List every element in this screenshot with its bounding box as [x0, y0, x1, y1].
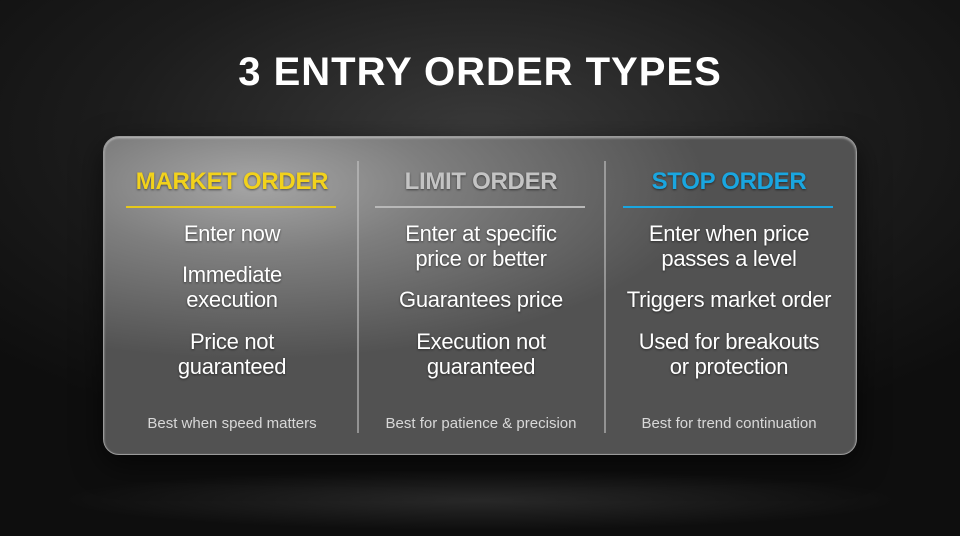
- column: limit order: Execution not: [416, 329, 546, 354]
- heading: market order: MARKET ORDER: [136, 168, 328, 195]
- column: limit order: guaranteed: [427, 354, 535, 379]
- panel: comparison card: [103, 136, 857, 455]
- column: stop order: [623, 168, 833, 432]
- footer: market: Best when speed matters: [147, 415, 317, 432]
- footer: limit: Best for patience & precision: [386, 415, 576, 432]
- text: stop points: passes a level: [661, 246, 797, 271]
- footer: stop: Best for trend continuation: [641, 415, 817, 432]
- text: stop points: Enter when price: [649, 221, 809, 246]
- column: limit order: Guarantees price: [399, 287, 563, 312]
- column: stop order: Used for breakouts: [639, 329, 819, 354]
- column: market order: Immediate: [182, 262, 282, 287]
- column: market order: [126, 168, 336, 432]
- text: limit points: Enter at specific: [405, 221, 557, 246]
- column: market order: Price not: [190, 329, 274, 354]
- column: market order: execution: [186, 287, 278, 312]
- column: market order: guaranteed: [178, 354, 286, 379]
- column: limit order: [375, 168, 585, 432]
- column: stop order: Triggers market order: [627, 287, 831, 312]
- column: stop order: or protection: [670, 354, 788, 379]
- text: limit points: price or better: [415, 246, 547, 271]
- heading: limit order: LIMIT ORDER: [405, 168, 557, 195]
- title: 3 ENTRY ORDER TYPES: [238, 50, 722, 94]
- text: limit points: [405, 221, 557, 272]
- text: market points: Enter now: [184, 221, 280, 246]
- text: stop points: [649, 221, 810, 272]
- floor reflection: [60, 470, 900, 530]
- heading: stop order: STOP ORDER: [652, 168, 806, 195]
